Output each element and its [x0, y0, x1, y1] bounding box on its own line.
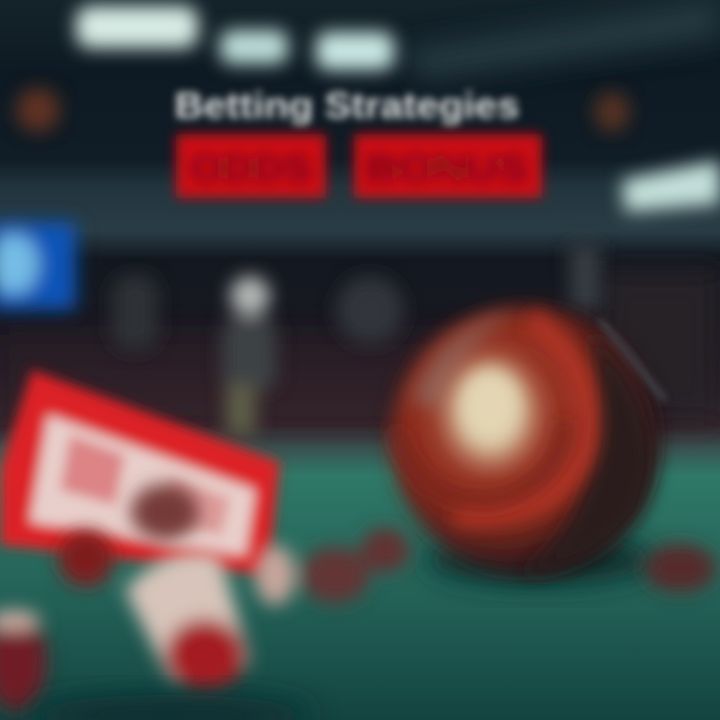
panel text: BONUS [366, 148, 528, 190]
ball body [391, 306, 659, 574]
red swirl [455, 318, 588, 515]
small tokens [0, 484, 716, 710]
right token [644, 544, 716, 592]
red ticket [0, 370, 280, 575]
blue screen [0, 222, 76, 310]
dark right side [520, 330, 652, 575]
red panel left [176, 134, 326, 198]
token near ticket [58, 530, 114, 586]
bottom dark shade [30, 695, 310, 720]
stadium lights [76, 6, 394, 70]
panel text [190, 148, 528, 190]
side floodlight [622, 160, 720, 212]
large red and white token [125, 552, 250, 687]
token on ticket [131, 484, 199, 540]
large ball [391, 306, 665, 584]
lower left token [0, 610, 46, 710]
scoreboard panels [176, 134, 542, 198]
heading: Betting Strategies [174, 85, 520, 126]
panel text: ODDS [190, 148, 312, 190]
ball handle line [600, 320, 665, 400]
pale token [255, 545, 295, 605]
stadium roof band [0, 0, 720, 425]
brown tokens [301, 547, 369, 603]
red panel right [354, 134, 542, 198]
pale upper rim [410, 312, 520, 410]
ball shadow [425, 536, 655, 584]
cream centre [448, 362, 532, 462]
orange glow left [16, 88, 60, 132]
background figures [112, 245, 600, 435]
orange glow right [594, 92, 630, 132]
